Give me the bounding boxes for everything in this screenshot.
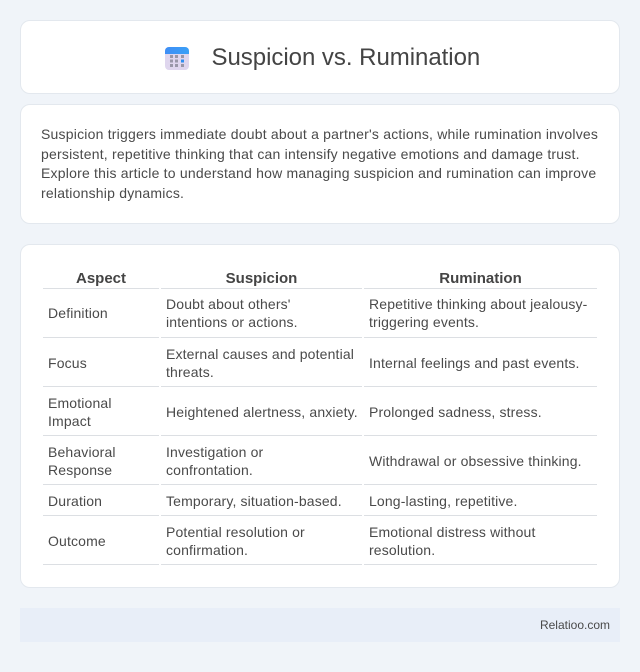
row: Definition: Repetitive thinking about jealousy-	[369, 296, 588, 312]
row: Emotional Impact: Emotional	[48, 395, 112, 411]
row: Behavioral Response	[48, 444, 582, 478]
table header: Aspect	[76, 270, 126, 287]
intro text	[41, 126, 598, 201]
row: Definition: Doubt about others'	[166, 296, 291, 312]
table header: Suspicion	[226, 270, 297, 287]
row: Outcome: Outcome	[48, 533, 106, 549]
row: Behavioral Response: Investigation or	[166, 444, 263, 460]
row: Focus: threats.	[166, 364, 214, 380]
row: Outcome: confirmation.	[166, 542, 248, 558]
row: Focus	[48, 346, 580, 380]
row: Outcome: Emotional distress without	[369, 524, 536, 540]
panel: comparison table	[20, 244, 620, 588]
row: Definition: triggering events.	[369, 314, 479, 330]
intro text: persistent, repetitive thinking that can intensify negative emotions and damage trust.	[41, 146, 580, 162]
row: Behavioral Response: Withdrawal or obsessive thinking.	[369, 453, 582, 469]
row: Duration: Temporary, situation-based.	[166, 493, 342, 509]
table header	[76, 270, 522, 287]
row: Emotional Impact: Impact	[48, 413, 91, 429]
row: Outcome	[48, 524, 536, 558]
row: Behavioral Response: Behavioral	[48, 444, 116, 460]
row: Behavioral Response: Response	[48, 462, 112, 478]
row: Emotional Impact: Heightened alertness, anxiety.	[166, 404, 358, 420]
row: Focus: Internal feelings and past events.	[369, 355, 580, 371]
footer credit: Relatioo.com	[540, 618, 610, 632]
intro text: Suspicion triggers immediate doubt about a partner's actions, while rumination involves	[41, 126, 598, 142]
intro text: Explore this article to understand how managing suspicion and rumination can improve	[41, 165, 596, 181]
panel: header	[20, 20, 620, 94]
row: Definition: Definition	[48, 305, 108, 321]
intro text: relationship dynamics.	[41, 184, 184, 200]
row: Outcome: resolution.	[369, 542, 435, 558]
row: Definition	[48, 296, 588, 330]
icon: calendar	[165, 47, 189, 70]
row: Outcome: Potential resolution or	[166, 524, 305, 540]
row: Behavioral Response: confrontation.	[166, 462, 253, 478]
title: Suspicion vs. Rumination	[212, 44, 480, 71]
row: Definition: intentions or actions.	[166, 314, 298, 330]
footer	[20, 608, 620, 642]
row: Emotional Impact: Prolonged sadness, stress.	[369, 404, 542, 420]
row: Duration: Duration	[48, 493, 102, 509]
panel: intro	[20, 104, 620, 224]
row: Duration: Long-lasting, repetitive.	[369, 493, 518, 509]
row: Emotional Impact	[48, 395, 542, 429]
row: Focus: Focus	[48, 355, 87, 371]
row: Focus: External causes and potential	[166, 346, 354, 362]
table header: Rumination	[439, 270, 522, 287]
row: Duration	[48, 493, 518, 509]
